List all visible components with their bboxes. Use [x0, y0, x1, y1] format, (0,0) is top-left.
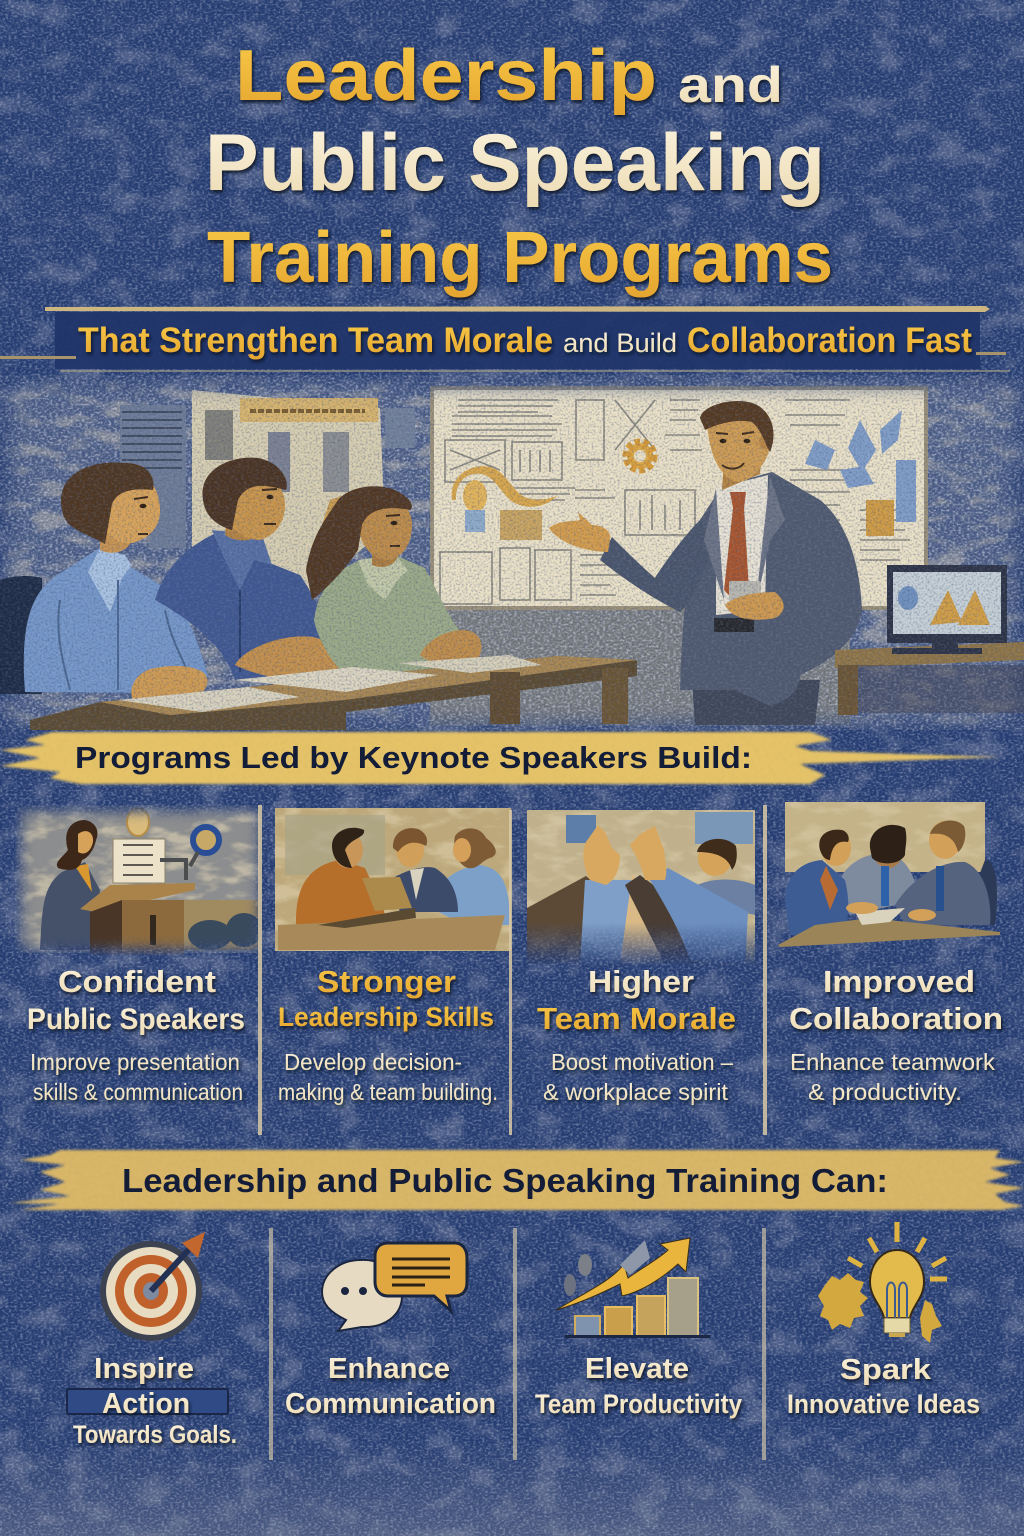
- banner: programs led by keynote speakers: Programs Led by Keynote Speakers Build:: [75, 740, 752, 775]
- panel 4: improved collaboration: & productivity.: [808, 1079, 962, 1105]
- shirt: [716, 475, 768, 615]
- panel 2: stronger leadership skills: Develop decision-: [284, 1049, 462, 1075]
- panel 4: improved collaboration: Improved: [823, 964, 975, 999]
- action box: [67, 1389, 228, 1414]
- laptop: [362, 877, 412, 911]
- panel 1: confident public speakers: Improve presentation: [30, 1049, 240, 1075]
- benefit: spark innovative ideas: Innovative Ideas: [787, 1389, 980, 1419]
- panel 3: higher team morale: Boost motivation –: [551, 1049, 733, 1075]
- title: Training Programs: [207, 218, 833, 298]
- benefit: elevate team productivity: Team Productivity: [535, 1389, 742, 1419]
- jacket right: [625, 875, 700, 965]
- panel 1: confident public speakers: Confident: [58, 964, 216, 999]
- board bulb: [452, 466, 557, 507]
- panel 4: improved collaboration: Enhance teamwork: [790, 1049, 996, 1075]
- benefit: inspire action: Inspire: [94, 1353, 194, 1385]
- panel 2: stronger leadership skills: making & team building.: [278, 1079, 498, 1105]
- neck and head: [722, 445, 762, 490]
- table: [278, 915, 505, 950]
- conference table: [30, 655, 637, 730]
- panel 1: confident public speakers: skills & communication: [33, 1079, 243, 1105]
- whiteboard: [432, 388, 926, 608]
- medallion: [127, 808, 149, 836]
- student 3: [306, 486, 481, 677]
- checklist: [113, 839, 165, 883]
- icon: rising chart: [556, 1238, 710, 1338]
- subtitle ribbon: Collaboration Fast: [687, 321, 972, 360]
- man 2: [836, 852, 920, 915]
- boardroom illustration: [778, 802, 1000, 947]
- subtitle ribbon: That Strengthen Team Morale: [78, 321, 553, 360]
- outstretched arm: [600, 520, 712, 612]
- panel 1: confident public speakers: [15, 805, 262, 1105]
- holding hand: [725, 592, 784, 620]
- title: Public Speaking: [205, 118, 825, 208]
- man 3: [895, 862, 990, 925]
- benefit: inspire action: Towards Goals.: [73, 1421, 237, 1449]
- hero wall: [0, 375, 1024, 730]
- benefit: spark innovative ideas: [787, 1222, 980, 1419]
- benefit: enhance communication: Enhance: [328, 1353, 450, 1385]
- belt: [714, 618, 754, 632]
- icon: speech bubbles: [322, 1243, 467, 1331]
- table: [778, 918, 1000, 947]
- title: Leadership: [235, 36, 657, 116]
- banner: training can: [0, 1146, 1024, 1214]
- banner: training can: Leadership and Public Speaking Training Can:: [122, 1162, 888, 1199]
- man in suit: [390, 867, 458, 912]
- panel 2: stronger leadership skills: [275, 808, 511, 1105]
- banner: programs led by keynote speakers: [0, 728, 1024, 788]
- monitor and desk: [835, 565, 1024, 715]
- subtitle ribbon: and Build: [563, 328, 677, 358]
- podium illustration: [15, 805, 262, 955]
- panel 3: higher team morale: & workplace spirit: [543, 1079, 729, 1105]
- microphone: [160, 852, 198, 880]
- left poster: [120, 390, 415, 600]
- benefit: enhance communication: [285, 1243, 496, 1420]
- student 1: [24, 463, 208, 705]
- high five illustration: [527, 808, 755, 965]
- woman in blue: [430, 865, 510, 925]
- panel 3: higher team morale: Team Morale: [537, 1001, 736, 1036]
- panel 3: higher team morale: [527, 808, 755, 1105]
- title: [205, 36, 833, 298]
- lectern: [80, 883, 195, 912]
- jacket left: [527, 876, 590, 962]
- man in orange: [296, 860, 385, 925]
- benefit: elevate team productivity: [535, 1238, 742, 1419]
- raised arm sleeve: [650, 868, 748, 965]
- speaker: [549, 401, 862, 725]
- man 1: [785, 860, 848, 935]
- lapels: [704, 488, 724, 600]
- title: and: [678, 57, 783, 113]
- legs: [692, 680, 820, 725]
- icon: light bulb: [818, 1222, 947, 1343]
- left hand: [583, 825, 620, 885]
- panel 1: confident public speakers: Public Speakers: [27, 1003, 245, 1036]
- benefit: elevate team productivity: Elevate: [585, 1353, 689, 1385]
- blue seal: [193, 827, 219, 853]
- plants: [188, 920, 232, 950]
- panel 4: improved collaboration: Collaboration: [789, 1001, 1003, 1036]
- sweater: [580, 880, 632, 964]
- benefit: spark innovative ideas: Spark: [840, 1354, 932, 1386]
- benefit: inspire action: [67, 1232, 237, 1449]
- benefit: enhance communication: Communication: [285, 1388, 496, 1420]
- shirt center: [620, 875, 658, 962]
- panel 4: improved collaboration: [778, 802, 1003, 1105]
- icon: target: [100, 1232, 205, 1341]
- tie: [724, 492, 749, 604]
- panel 2: stronger leadership skills: Leadership Skills: [278, 1002, 494, 1032]
- panel 3: higher team morale: Higher: [588, 964, 694, 999]
- speaker hand: [549, 512, 610, 552]
- background man: [698, 880, 755, 915]
- board sun: [627, 443, 653, 469]
- woman: [40, 862, 100, 950]
- subtitle ribbon: [0, 306, 1010, 372]
- right hand: [630, 826, 666, 880]
- panel 2: stronger leadership skills: Stronger: [317, 964, 456, 999]
- chair: [0, 576, 42, 694]
- jacket: [680, 472, 862, 706]
- board flowers: [805, 410, 916, 536]
- hands: [846, 902, 878, 914]
- student 2: [155, 458, 340, 681]
- phone: [729, 581, 761, 601]
- team at laptop illustration: [275, 808, 511, 951]
- benefit: inspire action: Action: [102, 1388, 190, 1420]
